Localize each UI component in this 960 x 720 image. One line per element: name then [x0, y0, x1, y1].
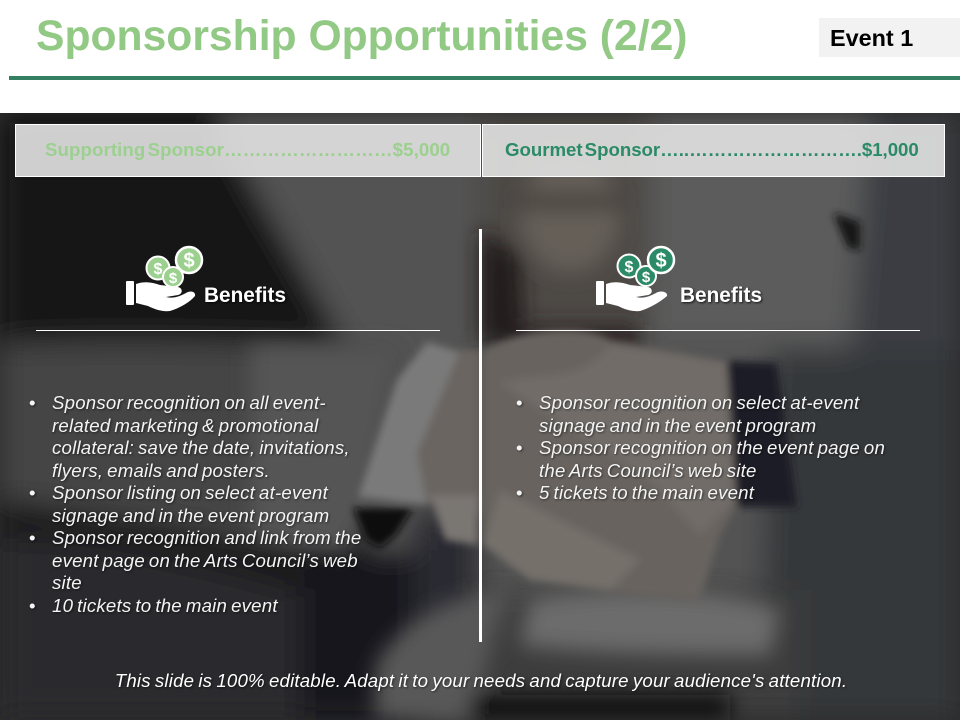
left benefits list: Sponsor recognition and link from the	[52, 527, 361, 548]
coins: $	[642, 269, 651, 286]
icon: hand with coins, dark	[596, 246, 676, 312]
right benefits list: 5 tickets to the main event	[539, 482, 754, 503]
left benefits list: Sponsor recognition on all event-	[52, 392, 326, 413]
right benefits list: the Arts Council’s web site	[539, 460, 757, 480]
heading: benefits right: Benefits	[680, 284, 762, 307]
left benefits list: flyers, emails and posters.	[52, 460, 270, 480]
sponsor band: gourmet: Gourmet Sponsor…..……………………….$1,000	[505, 139, 919, 160]
right benefits list: signage and in the event program	[539, 414, 816, 436]
coins	[146, 247, 202, 287]
left benefits list: related marketing & promotional	[52, 414, 318, 436]
heading: benefits left: Benefits	[204, 284, 286, 307]
sponsor band: gourmet	[482, 124, 945, 177]
hand	[596, 281, 667, 311]
coins: $	[169, 270, 178, 287]
right benefits list	[516, 392, 886, 503]
left benefits list	[30, 392, 362, 616]
left benefits list: site	[52, 572, 82, 593]
sponsor band: supporting: Supporting Sponsor………………………$5,000	[45, 139, 450, 160]
event tag: Event 1	[830, 25, 913, 51]
title rule	[9, 76, 960, 80]
left benefits list: 10 tickets to the main event	[52, 594, 278, 616]
coins: $	[154, 261, 163, 278]
left benefits list: signage and in the event program	[52, 504, 329, 526]
left benefits list: collateral: save the date, invitations,	[52, 437, 350, 458]
coins: $	[183, 250, 195, 272]
left benefits list: event page on the Arts Council’s web	[52, 550, 358, 570]
sponsor band: supporting	[15, 124, 481, 177]
event tag	[819, 18, 960, 57]
coins: $	[655, 250, 667, 272]
hand	[126, 281, 195, 311]
icon: hand with coins, light	[126, 246, 204, 312]
rule left	[36, 330, 440, 331]
coins	[618, 247, 674, 286]
rule right	[516, 330, 920, 331]
center divider	[479, 229, 482, 642]
footer note: This slide is 100% editable. Adapt it to your needs and capture your audience's attention.	[115, 670, 847, 691]
title: Sponsorship Opportunities (2/2)	[36, 12, 687, 60]
right benefits list: Sponsor recognition on the event page on	[539, 437, 885, 458]
right benefits list: Sponsor recognition on select at-event	[539, 392, 859, 413]
left benefits list: Sponsor listing on select at-event	[52, 482, 328, 503]
coins: $	[625, 259, 634, 276]
